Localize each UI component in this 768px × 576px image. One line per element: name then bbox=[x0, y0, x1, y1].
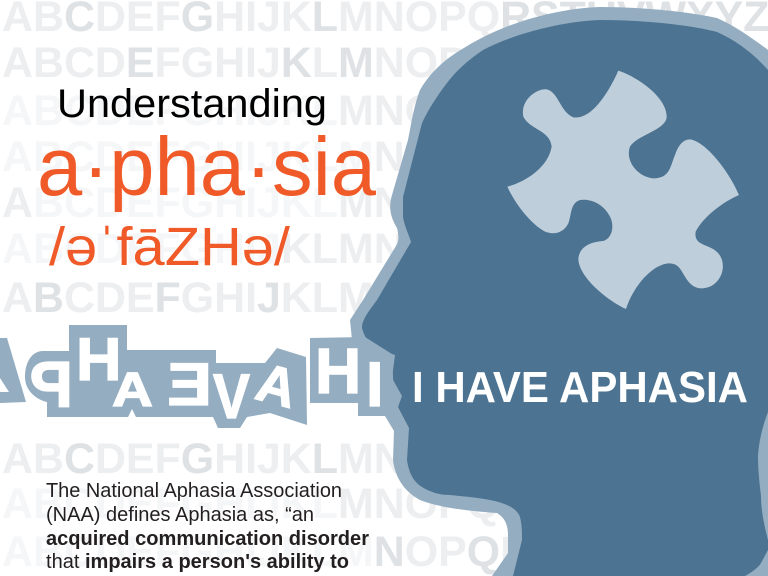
background alphabet pattern: ABCDEFGHIJKLMNOPQRSTUVWXYZ bbox=[2, 225, 768, 273]
head fill bbox=[362, 20, 768, 576]
background alphabet pattern: ABCDEFGHIJKLMNOPQRSTUVWXYZ bbox=[2, 528, 768, 576]
background alphabet pattern: ABCDEFGHIJKLMNOPQRSTUVWXYZ bbox=[2, 179, 768, 227]
background alphabet pattern: ABCDEFGHIJKLMNOPQRSTUVWXYZ bbox=[2, 435, 768, 483]
title: understanding: Understanding bbox=[57, 82, 327, 126]
letter V: V bbox=[213, 361, 250, 432]
background alphabet pattern: ABCDEFGHIJKLMNOPQRSTUVWXYZ bbox=[2, 87, 768, 135]
background alphabet pattern: ABCDEFGHIJKLMNOPQRSTUVWXYZ bbox=[2, 39, 768, 87]
head outline bbox=[350, 7, 768, 576]
rotated letter A: A bbox=[250, 352, 303, 420]
mirrored letter P: P bbox=[30, 348, 73, 421]
background alphabet pattern: ABCDEFGHIJKLMNOPQRSTUVWXYZ bbox=[2, 133, 768, 181]
letter A: A bbox=[112, 363, 153, 417]
definition text block: that impairs a person's ability to bbox=[46, 551, 349, 573]
letter I: I bbox=[366, 350, 384, 420]
definition text block: acquired communication disorder bbox=[46, 528, 369, 550]
definition text block: (NAA) defines Aphasia as, “an bbox=[46, 504, 314, 526]
background alphabet pattern: ABCDEFGHIJKLMNOPQRSTUVWXYZ bbox=[2, 274, 768, 322]
mirrored letter E: E bbox=[167, 351, 212, 418]
head silhouette bbox=[350, 7, 768, 576]
pronunciation: /əˈfāZHə/ bbox=[49, 217, 290, 277]
title: aphasia syllables: a·pha·sia bbox=[37, 120, 377, 213]
left letter A fragment bbox=[0, 378, 9, 392]
I have aphasia statement: I HAVE APHASIA bbox=[412, 363, 748, 412]
band outline shapes bbox=[0, 325, 395, 428]
definition text block bbox=[46, 480, 369, 573]
letter H: H bbox=[76, 326, 121, 394]
letter H: H bbox=[315, 335, 361, 407]
definition text block: The National Aphasia Association bbox=[46, 480, 342, 502]
puzzle piece icon bbox=[507, 71, 739, 309]
background alphabet pattern: ABCDEFGHIJKLMNOPQRSTUVWXYZ bbox=[2, 480, 768, 528]
jumbled letters band bbox=[0, 325, 395, 432]
